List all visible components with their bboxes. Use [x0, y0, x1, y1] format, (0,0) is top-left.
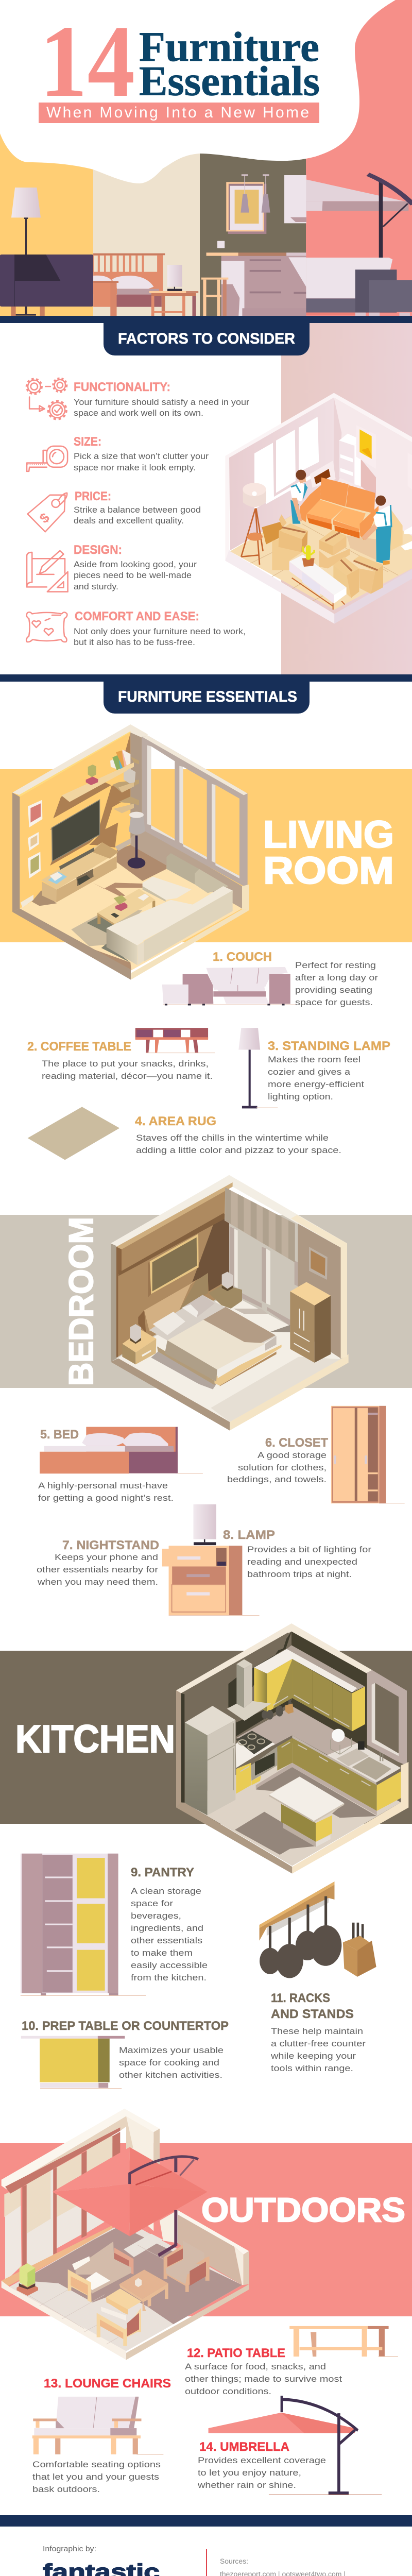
item: lamp [223, 1528, 371, 1579]
standing lamp text: more energy-efficient [268, 1079, 364, 1089]
sink and dish rack [327, 1729, 401, 1783]
item: patio table: 12. PATIO TABLE [187, 2346, 285, 2360]
umbrella text [197, 2455, 326, 2490]
sources [220, 2557, 391, 2576]
functionality text [74, 380, 249, 418]
item: standing lamp [238, 1028, 390, 1108]
prep table text [119, 2045, 224, 2080]
lounge chairs text: bask outdoors. [32, 2484, 100, 2494]
panel: living room [0, 724, 412, 1160]
item: prep table: 10. PREP TABLE OR COUNTERTOP [22, 2019, 229, 2033]
item: nightstand: 7. NIGHTSTAND [62, 1538, 159, 1552]
boxes [262, 510, 403, 599]
bed text: A highly-personal must-have [38, 1481, 168, 1490]
patio table text: A surface for food, snacks, and [185, 2362, 326, 2371]
planter [16, 2263, 38, 2296]
headboard [138, 1273, 208, 1333]
pantry text: from the kitchen. [131, 1973, 207, 1982]
pantry text: to make them [131, 1948, 193, 1958]
racks text: while keeping your [270, 2051, 356, 2061]
nightstand text: when you may need them. [37, 1577, 158, 1587]
nightstand with lamp [149, 265, 198, 316]
heading: living room [263, 813, 394, 892]
item: couch [162, 950, 378, 1007]
footer [0, 2515, 412, 2576]
price text: Strike a balance between good [74, 505, 201, 515]
lamp text: Provides a bit of lighting for [247, 1545, 371, 1554]
umbrella text: whether rain or shine. [197, 2480, 296, 2490]
divider bar and heading: furniture essentials: FURNITURE ESSENTIALS [118, 688, 297, 705]
size text: SIZE: [74, 435, 101, 449]
tv stand with cactus [289, 545, 347, 609]
pantry text [131, 1886, 208, 1982]
racks heading: 11. RACKS [271, 1991, 330, 2005]
item: lounge chairs: 13. LOUNGE CHAIRS [44, 2377, 171, 2391]
design text: Aside from looking good, your [74, 560, 197, 569]
couch text: after a long day or [295, 973, 378, 982]
item: lounge chairs [32, 2377, 171, 2494]
wall pictures [356, 425, 412, 489]
area rug text [136, 1133, 341, 1155]
title: Essentials [139, 58, 320, 104]
illustration: moving room [225, 393, 412, 624]
item: area rug [28, 1107, 341, 1160]
shelf unit [339, 434, 361, 486]
patio table text: other things; made to survive most [185, 2374, 342, 2384]
sectional sofa [107, 853, 233, 965]
nightstand text [37, 1552, 158, 1587]
bed text: for getting a good night’s rest. [38, 1493, 174, 1503]
illustration: kitchen [176, 1623, 408, 1874]
icon: tape measure [27, 446, 67, 471]
pantry text: other essentials [131, 1936, 202, 1945]
armchair [0, 255, 93, 316]
armchair back [164, 2241, 210, 2292]
closet text: beddings, and towels. [227, 1475, 327, 1484]
icon: bed [40, 1427, 203, 1473]
standing lamp text [268, 1055, 364, 1101]
standing lamp text: cozier and gives a [268, 1067, 351, 1077]
patio floor [2, 2210, 249, 2360]
patio table text: outdoor conditions. [185, 2386, 271, 2396]
nightstand text: Keeps your phone and [55, 1552, 158, 1562]
couch text: providing seating [295, 985, 372, 995]
heading: bedroom: BEDROOM [62, 1217, 100, 1386]
pantry text: A clean storage [131, 1886, 201, 1896]
floor slab [176, 1762, 408, 1874]
closet text: solution for clothes, [238, 1463, 327, 1472]
window and curtain [225, 1188, 341, 1359]
window wall [130, 736, 249, 910]
stool [401, 527, 412, 550]
comfort text: but it also has to be fuss-free. [74, 637, 195, 647]
coffee table text [42, 1059, 213, 1081]
item: umbrella: 14. UMBRELLA [199, 2440, 289, 2454]
illustration: bedroom [111, 1175, 349, 1431]
item: racks and stands [260, 1882, 376, 2073]
bedroom floor [111, 1243, 349, 1431]
item: standing lamp: 3. STANDING LAMP [268, 1039, 390, 1053]
bed [93, 253, 165, 316]
panel: bedroom [0, 1175, 412, 1616]
subtitle banner: When Moving Into a New Home [46, 104, 309, 121]
lounge chairs text: that let you and your guests [32, 2472, 159, 2482]
item: prep table [21, 2019, 229, 2089]
windows [254, 417, 319, 509]
item: closet: 6. CLOSET [265, 1436, 328, 1450]
illustration: patio [2, 2109, 249, 2360]
prep table text: Maximizes your usable [119, 2045, 224, 2055]
icon: area rug [28, 1107, 119, 1160]
design text: pieces need to be well-made [74, 570, 192, 580]
pans and knife block [262, 1700, 294, 1720]
upper cabinet [284, 175, 306, 223]
standing lamp text: lighting option. [268, 1092, 333, 1101]
nightstand front [122, 1324, 156, 1364]
panel: kitchen [0, 1623, 412, 2089]
wall shadows [50, 733, 139, 866]
wall pictures [28, 800, 42, 878]
heading: living room: ROOM [263, 849, 394, 892]
functionality text: Your furniture should satisfy a need in your [74, 397, 249, 407]
numeral 14: 14 [40, 5, 135, 118]
icon: prep table [21, 2036, 125, 2089]
lounge chairs text [32, 2460, 161, 2494]
divider bar and heading: furniture essentials [0, 674, 412, 714]
mover left [290, 470, 307, 524]
upper cabinets [254, 1649, 365, 1732]
title: Furniture [139, 23, 319, 70]
umbrella canopy [53, 2147, 208, 2257]
coffee table text: reading material, décor—you name it. [42, 1071, 213, 1081]
racks heading [271, 1991, 354, 2021]
heading: outdoors: OUTDOORS [201, 2191, 405, 2229]
bed text [38, 1481, 174, 1503]
price text [74, 489, 201, 526]
lower cabinets [236, 1738, 401, 1815]
kitchen counter [207, 252, 306, 316]
coffee table [97, 889, 156, 926]
area rug text: Staves off the chills in the wintertime while [136, 1133, 329, 1143]
icon: standing lamp [238, 1028, 278, 1108]
item: nightstand [37, 1504, 260, 1616]
design text: and sturdy. [74, 582, 118, 591]
credit label: Infographic by: [43, 2545, 96, 2553]
icon: gears [27, 378, 67, 419]
sources: Sources: [220, 2557, 248, 2565]
television [52, 800, 99, 861]
heading tab: factors [104, 319, 310, 355]
couch text: Perfect for resting [295, 960, 376, 970]
racks heading: AND STANDS [271, 2007, 354, 2021]
size text: space nor make it look empty. [74, 463, 196, 472]
header panel [0, 0, 412, 316]
pendant lamps [241, 174, 270, 213]
panel: outdoors [0, 2109, 412, 2495]
prep table text: other kitchen activities. [119, 2070, 222, 2080]
item: closet [227, 1406, 405, 1503]
heading tab: factors: FACTORS TO CONSIDER [118, 330, 295, 347]
umbrella [306, 174, 412, 258]
range hood [227, 1659, 271, 1721]
nightstand back [209, 1272, 242, 1309]
lounge chairs text: Comfortable seating options [32, 2460, 161, 2469]
fridge [185, 1706, 235, 1815]
bed [149, 1295, 282, 1386]
size text: Pick a size that won’t clutter your [74, 451, 209, 461]
rug [71, 909, 143, 962]
coffee table text: The place to put your snacks, drinks, [42, 1059, 209, 1069]
orange sofa [300, 478, 379, 540]
item: lamp: 8. LAMP [223, 1528, 275, 1542]
functionality text: space and work well on its own. [74, 408, 203, 418]
light switch [217, 241, 225, 248]
lamp text [247, 1545, 371, 1579]
comfort text: COMFORT AND EASE: [75, 609, 199, 623]
patio wall [2, 2109, 160, 2287]
lamp text: reading and unexpected [247, 1557, 357, 1567]
heading: living room: LIVING [263, 813, 394, 856]
closet text: A good storage [258, 1450, 327, 1460]
standing lamp [11, 188, 41, 255]
design text: DESIGN: [74, 543, 122, 557]
island [269, 1776, 344, 1847]
wall frame [148, 1234, 199, 1297]
counter [236, 1706, 401, 1785]
item: bed: 5. BED [40, 1428, 79, 1442]
nightstand text: other essentials nearby for [37, 1565, 158, 1574]
illustration: living room [12, 724, 249, 980]
plant on shelf [86, 765, 98, 785]
pantry text: space for [131, 1899, 173, 1908]
panel: factors to consider [0, 316, 412, 674]
item: area rug: 4. AREA RUG [135, 1114, 216, 1128]
tv console [21, 838, 131, 908]
item: umbrella [197, 2396, 382, 2495]
item: pantry [21, 1854, 208, 1996]
icon: price tag: $ [37, 510, 53, 527]
floor shadows [235, 1767, 377, 1855]
header furniture strip [0, 174, 412, 316]
racks text: These help maintain [271, 2026, 363, 2036]
wardrobe [290, 1282, 331, 1363]
item: bed [38, 1427, 203, 1503]
armchair front [97, 2307, 141, 2346]
floor slab [12, 908, 249, 980]
leaning frame [310, 461, 336, 488]
wall picture [226, 182, 266, 234]
item: patio table [185, 2326, 398, 2396]
living lamp [128, 812, 145, 869]
lounge chair [306, 258, 412, 316]
window [367, 1670, 407, 1766]
patio table [106, 2269, 168, 2315]
racks text: a clutter-free counter [271, 2039, 366, 2048]
functionality text: FUNCTIONALITY: [74, 380, 170, 394]
shelves and books [61, 750, 139, 813]
racks text: tools within range. [271, 2063, 353, 2073]
icon: pan rack and knife block [260, 1882, 376, 1978]
price text: PRICE: [75, 489, 111, 503]
lounge sofa [68, 2242, 133, 2302]
title [139, 23, 320, 104]
pantry text: ingredients, and [131, 1923, 203, 1933]
prep table text: space for cooking and [119, 2058, 219, 2067]
item: couch: 1. COUCH [213, 950, 272, 964]
icon: coffee table [135, 1028, 215, 1053]
back pillar [130, 733, 142, 841]
area rug text: adding a little color and pizzaz to your space. [136, 1145, 341, 1155]
design text [74, 543, 197, 591]
size text [74, 435, 209, 472]
comfort text: Not only does your furniture need to work, [74, 626, 246, 636]
icon: price tag [28, 493, 67, 532]
icon: closet [331, 1406, 405, 1503]
mover right [362, 496, 391, 565]
floor lamp [241, 483, 266, 565]
umbrella text: Provides excellent coverage [198, 2455, 326, 2465]
icon: design blueprint [27, 551, 68, 592]
standing lamp text: Makes the room feel [268, 1055, 360, 1064]
icon: umbrella [209, 2396, 382, 2495]
couch text: space for guests. [295, 997, 373, 1007]
icon: patio table [289, 2326, 398, 2357]
pantry text: beverages, [131, 1911, 181, 1921]
item: coffee table: 2. COFFEE TABLE [27, 1040, 131, 1054]
icon: lounge chair [32, 2397, 163, 2454]
white header blob [0, 0, 396, 183]
icon: pillow [26, 612, 67, 642]
closet text [227, 1450, 327, 1484]
pantry text: easily accessible [131, 1960, 208, 1970]
heading: kitchen: KITCHEN [15, 1717, 175, 1760]
icon: couch [162, 967, 297, 1005]
racks text [270, 2026, 366, 2073]
umbrella text: to let you enjoy nature, [198, 2468, 301, 2478]
lamp text: bathroom trips at night. [247, 1569, 352, 1579]
icon: pantry [21, 1854, 146, 1996]
item: pantry: 9. PANTRY [131, 1866, 194, 1879]
bar stool [201, 278, 228, 316]
item: coffee table [27, 1028, 215, 1081]
patio table text [185, 2362, 342, 2396]
couch text [295, 960, 378, 1007]
price text: deals and excellent quality. [74, 516, 184, 526]
icon: nightstand with lamp [162, 1504, 260, 1616]
comfort text [74, 609, 246, 647]
